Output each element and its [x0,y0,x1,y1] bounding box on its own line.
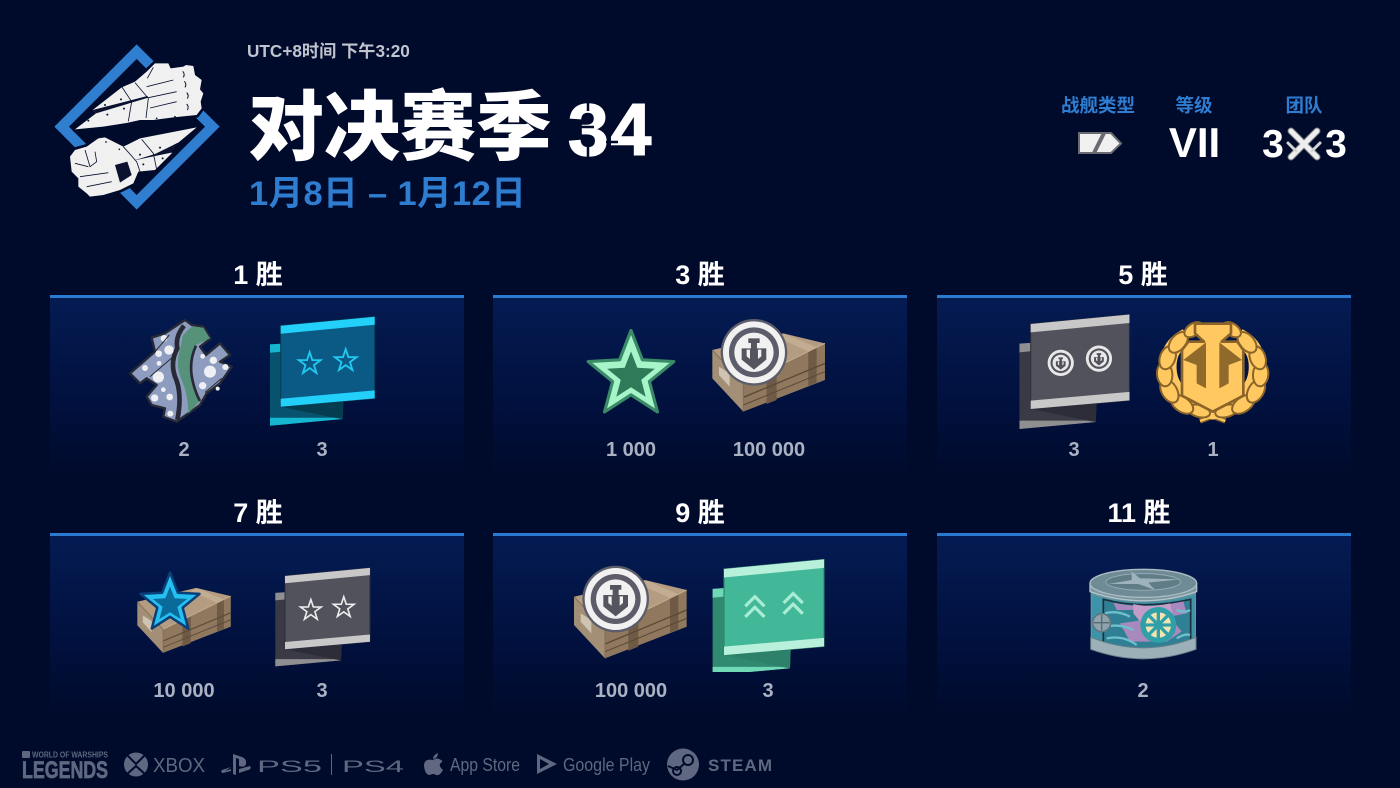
footer: Xbox [124,752,205,777]
panel: 11 wins: 11 胜 [1107,498,1171,528]
footer: World of Warships Legends logo: WORLD OF WARSHIPS [32,750,109,760]
panel: 7 wins: 7 胜 [233,498,283,528]
panel: 9 wins: 9 胜 [675,498,725,528]
icon: teal signal flag with stars [270,317,375,426]
panel: 3 wins [493,260,907,482]
logo: crossed gauntlets in a blue diamond [62,52,212,202]
icon: crate with coin [574,566,687,658]
tier [1169,95,1220,166]
icon: gold laurel emblem [1156,319,1269,421]
panel: 11 wins: 2 [1137,680,1149,702]
team size: 3 [1325,123,1347,166]
team size [1262,95,1347,166]
icon: green star [588,330,674,412]
panel: 7 wins: 10 000 [153,680,215,702]
panel: 11 wins [937,498,1351,722]
panel: 3 wins: 3 胜 [675,260,725,290]
footer: Steam [667,748,772,780]
panel: 5 wins [937,260,1351,482]
tier: 等级 [1175,95,1213,116]
team size: 3 [1262,123,1284,166]
panel: 3 wins: 100 000 [733,439,805,461]
date range: 1月8日 – 1月12日 [249,175,526,213]
panel: 9 wins: 100 000 [595,680,667,702]
icon: camouflage [130,320,232,422]
icon: grey signal flag with coins [1019,315,1129,429]
ship type [1061,95,1135,153]
footer: Google Play [537,754,650,775]
panel: 3 wins: 1 000 [606,439,656,461]
footer: PlayStation: PS4 [342,757,404,776]
panel: 1 win: 2 [178,439,190,461]
tier: VII [1169,119,1220,166]
panel: 7 wins [50,498,464,722]
title: 对决赛季 [248,86,552,171]
panel: 9 wins [493,499,907,697]
footer: Xbox: XBOX [153,755,205,777]
icon: decorative container [1090,569,1197,659]
panel: 1 win [50,260,464,482]
footer: World of Warships Legends logo: LEGENDS [22,757,108,784]
panel: 5 wins: 1 [1207,439,1219,461]
panel: 5 wins: 5 胜 [1118,260,1168,290]
footer: Steam: STEAM [708,756,772,775]
time: UTC+8时间 下午3:20 [247,41,410,61]
icon: grey signal flag with stars [275,568,370,666]
panel: 9 wins: 3 [762,680,774,702]
team size: 团队 [1285,95,1323,116]
icon: crate with blue star [137,572,231,653]
panel: 5 wins: 3 [1068,439,1080,461]
footer: World of Warships Legends logo [22,750,109,784]
footer: PlayStation [221,754,404,776]
footer: App Store: App Store [450,755,520,775]
footer: Google Play: Google Play [563,755,650,775]
panel: 1 win: 3 [316,439,328,461]
title: 34 [568,90,653,171]
footer: App Store [424,753,520,775]
panel: 1 win: 1 胜 [233,260,283,290]
icon: green signal flag with chevrons [713,559,824,675]
icon: crate with coin [712,319,825,412]
panel: 7 wins: 3 [316,680,328,702]
footer: PlayStation: PS5 [257,757,322,776]
ship type: 战舰类型 [1061,95,1135,116]
